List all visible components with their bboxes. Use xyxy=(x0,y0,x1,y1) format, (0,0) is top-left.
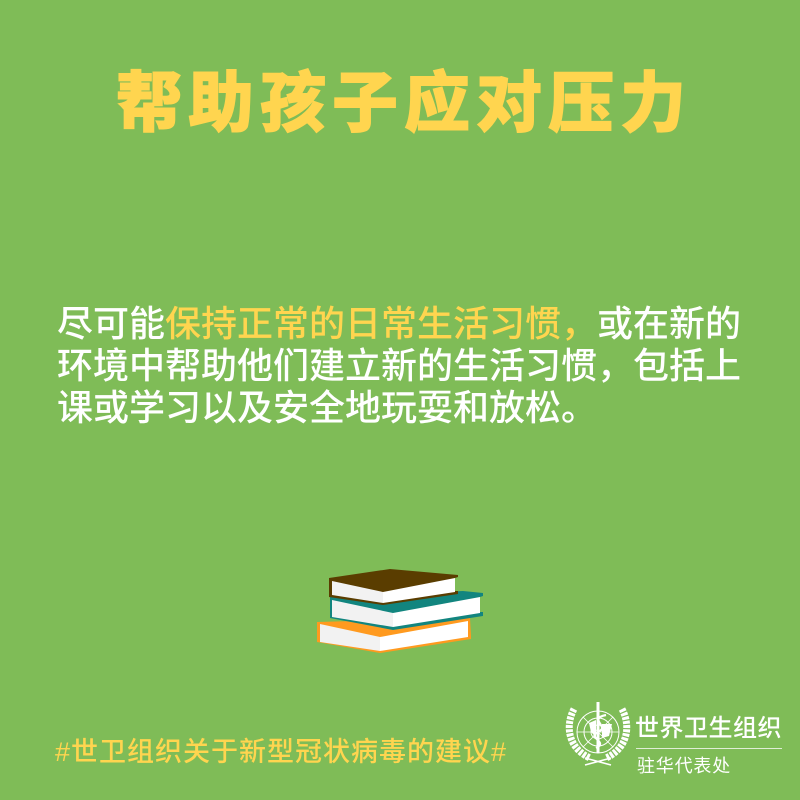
office name: 驻华代表处 xyxy=(637,756,731,776)
text block: main advice: 课或学习以及安全地玩耍和放松。 xyxy=(57,387,597,428)
logo divider xyxy=(636,748,782,749)
title: 帮助孩子应对压力 xyxy=(116,66,692,140)
bottom book: orange xyxy=(317,618,471,653)
middle book: teal xyxy=(330,591,483,630)
text block: main advice: 环境中帮助他们建立新的生活习惯，包括上 xyxy=(57,345,741,386)
icon: stack of books xyxy=(317,569,483,653)
top book: brown xyxy=(329,569,458,605)
text block: main advice xyxy=(57,303,741,428)
organisation name: 世界卫生组织 xyxy=(635,715,782,742)
text block: main advice: 尽可能保持正常的日常生活习惯，或在新的 xyxy=(57,303,741,344)
logo: WHO emblem xyxy=(566,702,630,766)
hashtag: #世卫组织关于新型冠状病毒的建议# xyxy=(55,737,507,767)
